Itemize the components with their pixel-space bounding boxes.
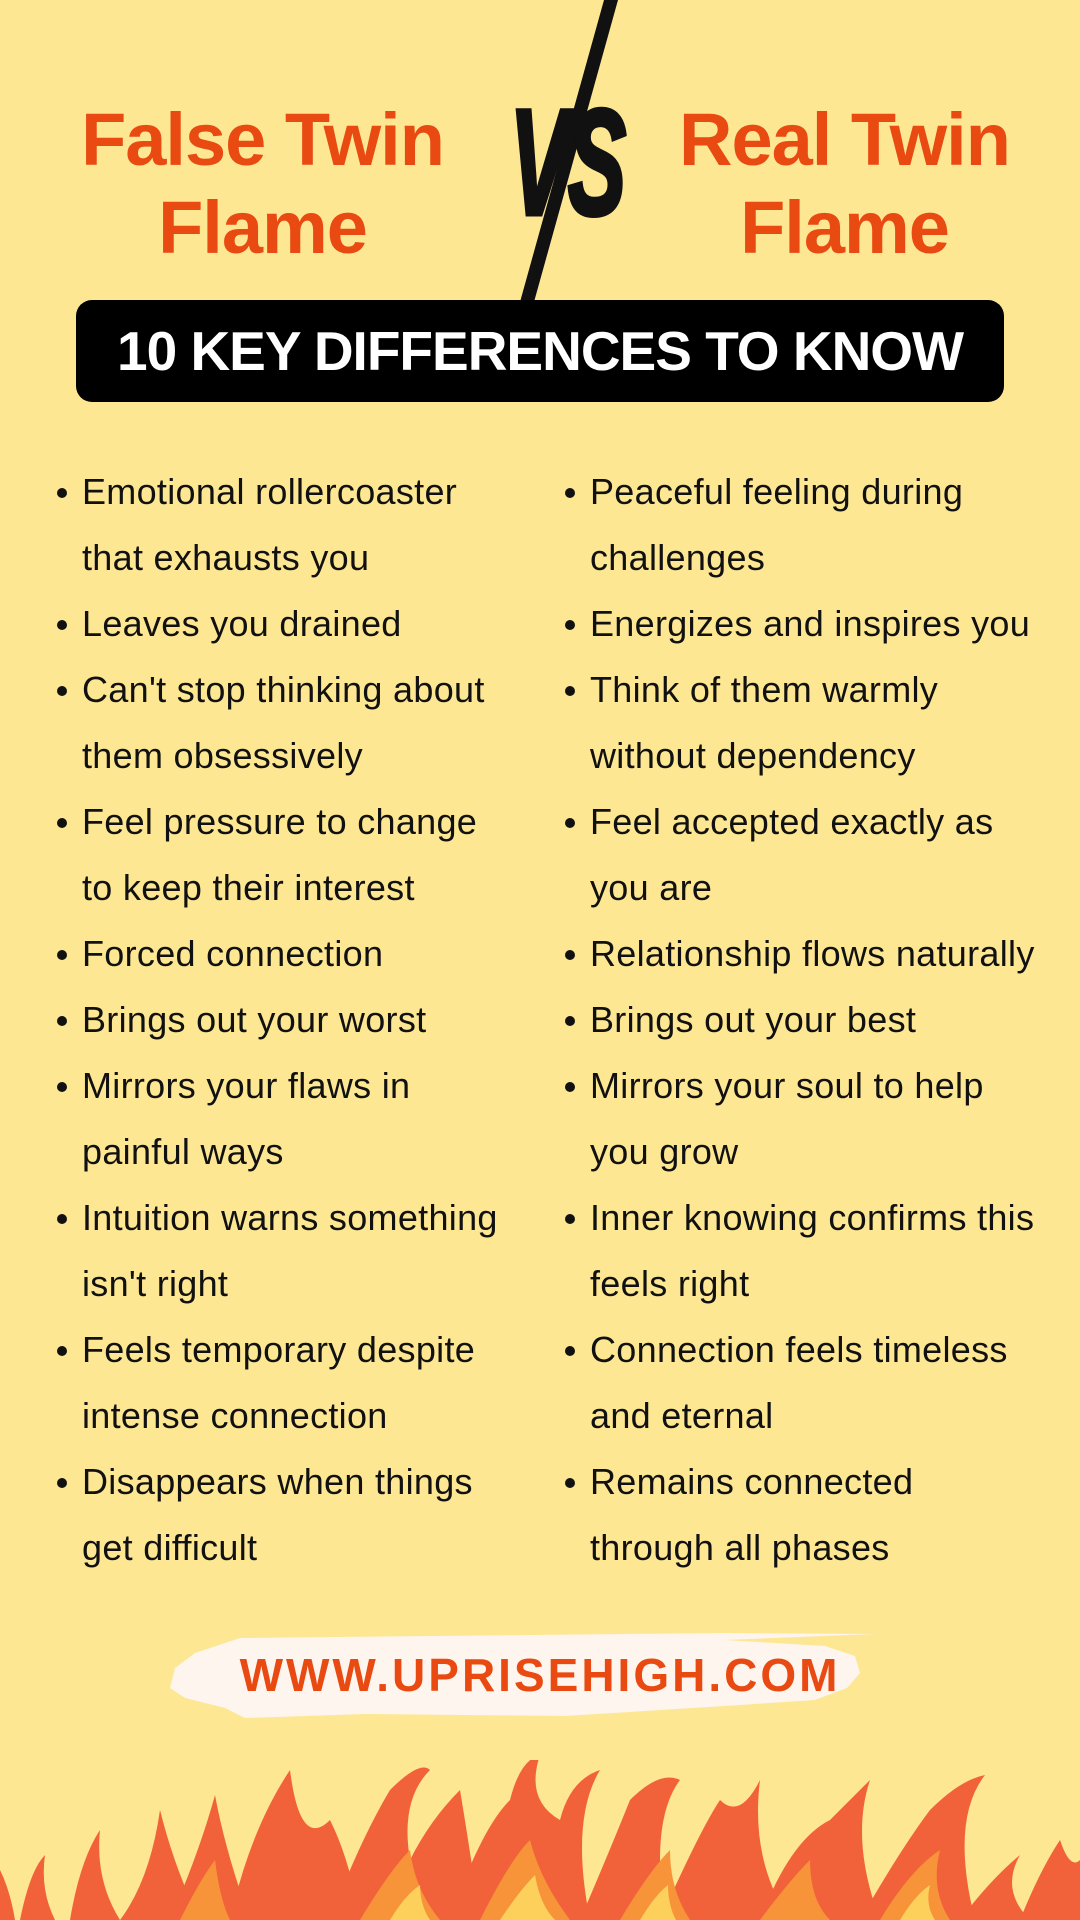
list: false twin flame signs: Brings out your worst [82, 999, 426, 1040]
list: real twin flame signs: you grow [590, 1131, 738, 1172]
list: false twin flame signs: Forced connection [82, 933, 383, 974]
title: real twin flame: Real Twin [679, 98, 1010, 181]
title: false twin flame: False Twin [81, 98, 444, 181]
list: real twin flame signs: Inner knowing confirms this [590, 1197, 1034, 1238]
list: real twin flame signs: Relationship flows naturally [590, 933, 1035, 974]
list: real twin flame signs: feels right [590, 1263, 749, 1304]
url brush banner [170, 1633, 874, 1718]
list: false twin flame signs: that exhausts you [82, 537, 369, 578]
flames illustration [0, 1760, 1080, 1920]
list: false twin flame signs: Intuition warns something [82, 1197, 498, 1238]
list: false twin flame signs: Mirrors your flaws in [82, 1065, 410, 1106]
list: false twin flame signs: intense connection [82, 1395, 388, 1436]
list: false twin flame signs: them obsessively [82, 735, 363, 776]
list: false twin flame signs: to keep their interest [82, 867, 415, 908]
list: false twin flame signs: Leaves you drained [82, 603, 402, 644]
list: false twin flame signs: get difficult [82, 1527, 257, 1568]
list: false twin flame signs: Can't stop thinking about [82, 669, 485, 710]
list: real twin flame signs: through all phases [590, 1527, 890, 1568]
banner: 10 key differences: 10 KEY DIFFERENCES TO KNOW [117, 320, 963, 382]
list: real twin flame signs: Peaceful feeling during [590, 471, 963, 512]
list: false twin flame signs: isn't right [82, 1263, 228, 1304]
title: real twin flame: Flame [740, 186, 949, 269]
list: real twin flame signs: Brings out your best [590, 999, 916, 1040]
divider slash [520, 0, 618, 300]
list: real twin flame signs: and eternal [590, 1395, 773, 1436]
list: real twin flame signs: Feel accepted exactly as [590, 801, 993, 842]
list: real twin flame signs: challenges [590, 537, 765, 578]
list: real twin flame signs: Think of them warmly [590, 669, 938, 710]
url brush banner: WWW.UPRISEHIGH.COM [240, 1649, 840, 1701]
list: false twin flame signs: Feels temporary despite [82, 1329, 475, 1370]
list: false twin flame signs: Feel pressure to change [82, 801, 477, 842]
list: false twin flame signs [57, 471, 498, 1568]
list: real twin flame signs: Connection feels timeless [590, 1329, 1008, 1370]
list: false twin flame signs: Disappears when things [82, 1461, 473, 1502]
list: real twin flame signs: without dependency [590, 735, 916, 776]
list: real twin flame signs: you are [590, 867, 712, 908]
title: false twin flame: Flame [158, 186, 367, 269]
title: real twin flame [679, 98, 1010, 269]
banner: 10 key differences [76, 300, 1004, 402]
list: real twin flame signs [565, 471, 1035, 1568]
title: false twin flame [81, 98, 444, 269]
list: false twin flame signs: Emotional rollercoaster [82, 471, 457, 512]
list: real twin flame signs: Energizes and inspires you [590, 603, 1030, 644]
list: false twin flame signs: painful ways [82, 1131, 284, 1172]
list: real twin flame signs: Remains connected [590, 1461, 913, 1502]
list: real twin flame signs: Mirrors your soul to help [590, 1065, 984, 1106]
